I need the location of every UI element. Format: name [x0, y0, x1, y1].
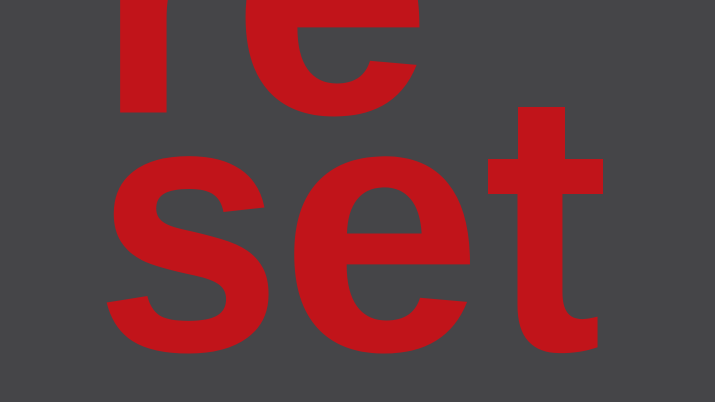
heading line 2: set [95, 24, 603, 402]
heading line 1: re [96, 0, 432, 190]
